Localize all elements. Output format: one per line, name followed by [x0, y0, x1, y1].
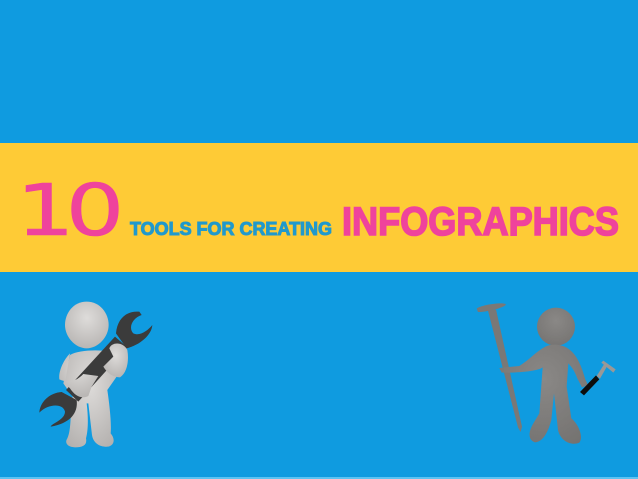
hammer grip	[580, 375, 599, 395]
left arm and hand	[59, 353, 98, 397]
title: tools for creating: TOOLS FOR CREATING	[130, 219, 332, 239]
hammer	[580, 361, 616, 395]
figure: person holding nail and hammer	[477, 303, 616, 444]
head	[65, 302, 109, 348]
nail head	[477, 303, 506, 312]
bottom edge line	[0, 477, 638, 479]
nail shaft	[488, 309, 522, 432]
body and arms	[499, 345, 588, 444]
head	[537, 308, 575, 346]
hammer head	[601, 361, 616, 373]
title: number 10: 10	[16, 170, 118, 252]
title band	[0, 143, 638, 272]
nail	[477, 303, 522, 432]
right arm and hand	[103, 344, 128, 377]
hammer upper handle	[597, 363, 608, 379]
wrench	[39, 312, 152, 427]
figure: person holding wrench	[39, 302, 152, 447]
wrench upper head	[116, 312, 152, 348]
body and legs	[63, 350, 117, 447]
wrench lower head	[39, 392, 77, 427]
wrench handle	[66, 337, 127, 402]
